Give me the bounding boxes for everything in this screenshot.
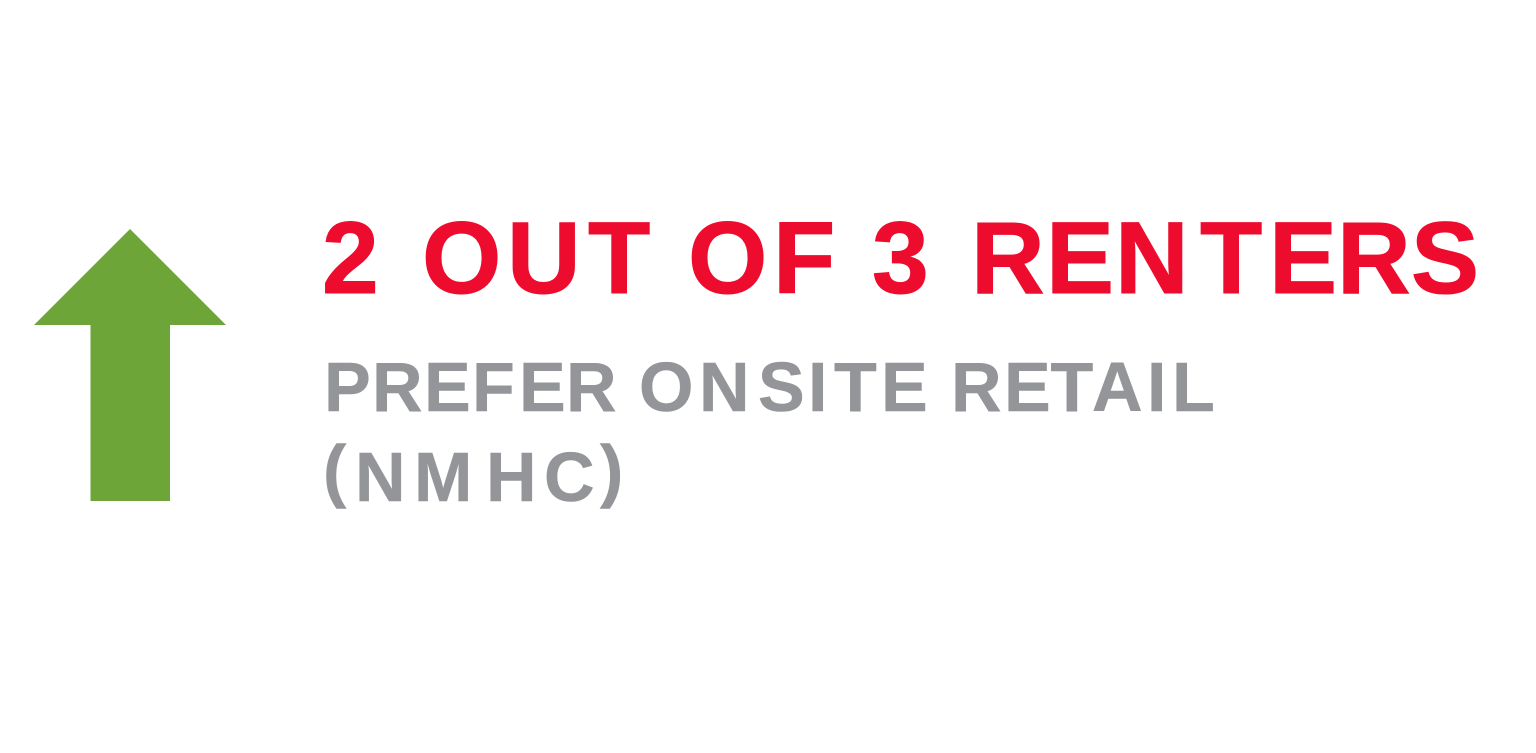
icon: green up arrow — [34, 229, 226, 501]
subheading line 1: PREFER ONSITE RETAIL — [324, 348, 1215, 426]
headline: 2 OUT OF 3 RENTERS — [322, 201, 1479, 315]
subheading line 2: (NMHC) — [323, 431, 623, 516]
